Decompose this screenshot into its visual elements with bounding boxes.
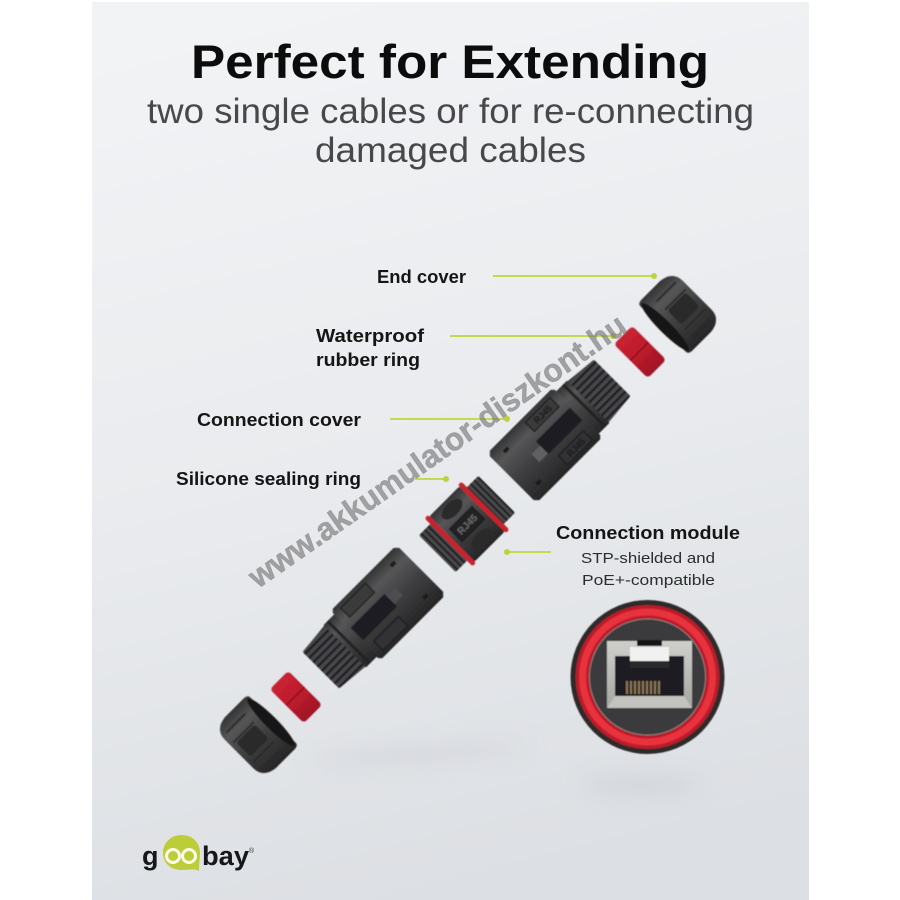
- callout: connection module: STP-shielded and: [581, 550, 715, 567]
- goobay logo: [142, 835, 255, 871]
- subtitle: [147, 92, 754, 170]
- callout: silicone sealing ring: [176, 469, 449, 489]
- connection cover: top: [487, 353, 637, 503]
- silicone sealing ring: front: [425, 515, 476, 566]
- watermark: www.akkumulator-diszkont.hu: [241, 307, 633, 595]
- goobay logo: bay: [202, 841, 249, 871]
- end cover: bottom: [214, 692, 301, 779]
- callout: waterproof rubber ring: Waterproof: [316, 326, 425, 346]
- subtitle: damaged cables: [315, 131, 586, 170]
- callout: end cover: [377, 267, 657, 287]
- callout: connection cover: [197, 410, 510, 430]
- callout: waterproof rubber ring: [316, 326, 616, 370]
- subtitle: two single cables or for re-connecting: [147, 92, 754, 131]
- title: Perfect for Extending: [191, 35, 709, 88]
- goobay logo: ®: [249, 847, 255, 855]
- connection module: [413, 470, 521, 578]
- callout: connection module: Connection module: [556, 523, 740, 543]
- callout: silicone sealing ring: Silicone sealing ring: [176, 469, 361, 489]
- end cover: top: [635, 270, 722, 357]
- callout: waterproof rubber ring: rubber ring: [316, 350, 420, 370]
- callout: connection cover: Connection cover: [197, 410, 361, 430]
- callout: connection module: [504, 523, 740, 589]
- callout: connection module: PoE+-compatible: [582, 572, 715, 589]
- callout: end cover: End cover: [377, 267, 466, 287]
- connection module: RJ45: [456, 512, 481, 537]
- connection cover: top: RJ45: [565, 437, 587, 459]
- connection cover: top: RJ45: [532, 403, 554, 426]
- floor shadow: [310, 740, 702, 793]
- connection cover: bottom: [296, 545, 446, 695]
- waterproof rubber ring: bottom: [270, 671, 322, 723]
- panel: background: [92, 2, 809, 900]
- silicone sealing ring: back: [458, 482, 509, 533]
- goobay logo: g: [142, 841, 158, 871]
- waterproof rubber ring: top: [614, 326, 666, 378]
- RJ45 port close-up: [570, 600, 724, 754]
